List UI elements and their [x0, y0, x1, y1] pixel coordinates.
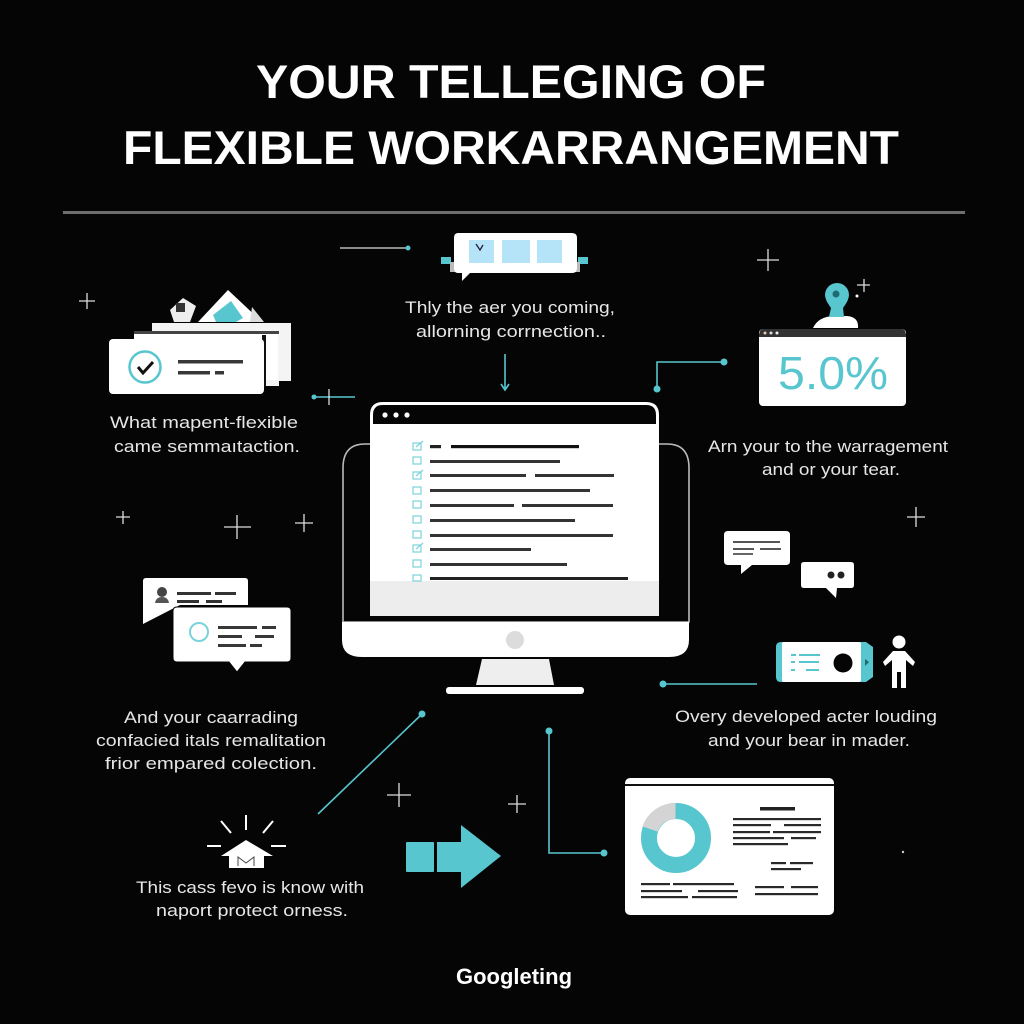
- panel: monitor: [342, 402, 689, 694]
- text: top caption: Thly the aer you coming,: [405, 298, 615, 317]
- text: left caption: [96, 708, 326, 773]
- text: bottom-left caption: [136, 878, 364, 920]
- text: left caption: frior empared colection.: [105, 754, 317, 773]
- title: YOUR TELLEGING OF: [256, 55, 766, 108]
- icon: connector top: [340, 246, 410, 250]
- icon: chat bubbles left: [143, 578, 291, 672]
- text: right caption: and or your tear.: [762, 460, 900, 479]
- text: left caption: confacied itals remalitation: [96, 731, 326, 750]
- text: top caption: [405, 298, 615, 341]
- checklist: [413, 441, 628, 581]
- icon: house mail with rays: [207, 815, 286, 868]
- donut chart: [649, 811, 703, 865]
- monitor stand: [476, 659, 554, 685]
- report text lines: [641, 807, 821, 898]
- footer logo text: Googleting: [456, 964, 572, 989]
- icon: speech bubbles right: [724, 531, 854, 598]
- text: right lower caption: [675, 707, 937, 750]
- icon: documents behind cards: [134, 290, 291, 387]
- icon: pin person: [813, 279, 870, 328]
- text: top-left caption: came semmaıtaction.: [114, 437, 300, 456]
- monitor chin: [342, 622, 689, 657]
- text: top caption: allorning corrnection..: [416, 322, 606, 341]
- connector: right middle: [660, 680, 757, 688]
- icon: top speech bubble with tiles: [441, 233, 588, 281]
- arrow: teal right: [406, 825, 501, 888]
- connector: diagonal: [318, 710, 426, 814]
- screen: [370, 402, 659, 616]
- connector: right elbow: [654, 358, 728, 392]
- text: top-left caption: What mapent-flexible: [110, 413, 298, 432]
- text: right caption: Arn your to the warragement: [708, 437, 948, 456]
- connector: bottom elbow: [546, 728, 608, 856]
- panel: report card: [625, 778, 834, 915]
- percent value: 5.0%: [778, 347, 888, 399]
- text: right lower caption: Overy developed acter louding: [675, 707, 937, 726]
- panel: cards top left: [109, 290, 291, 394]
- monitor bezel: [343, 444, 689, 622]
- title: [123, 55, 899, 174]
- connector: cross line: [312, 389, 355, 405]
- text: bottom-left caption: naport protect orness.: [156, 901, 348, 920]
- text: right caption: [708, 437, 948, 479]
- icon: front check card: [109, 339, 264, 394]
- text: left caption: And your caarrading: [124, 708, 298, 727]
- sparkles: [79, 249, 925, 853]
- arrow: down to monitor: [501, 354, 509, 390]
- text: bottom-left caption: This cass fevo is know with: [136, 878, 364, 897]
- panel: percent window: [759, 329, 906, 406]
- title: FLEXIBLE WORKARRANGEMENT: [123, 121, 899, 174]
- text: top-left caption: [110, 413, 300, 456]
- icon: device and person: [776, 636, 915, 688]
- text: right lower caption: and your bear in mader.: [708, 731, 910, 750]
